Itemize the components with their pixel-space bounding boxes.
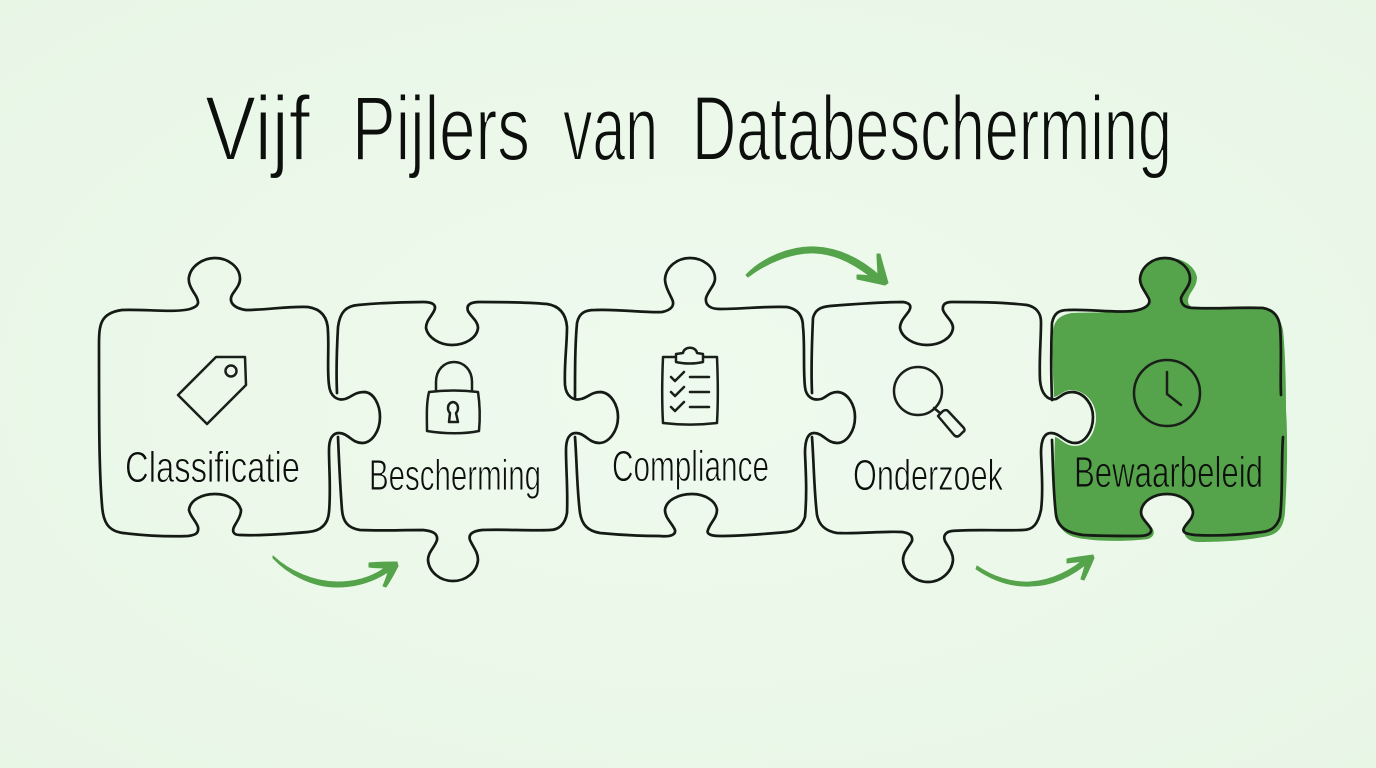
icon: magnifying glass xyxy=(894,367,964,436)
label: Compliance: Compliance xyxy=(612,442,769,491)
puzzle piece: Onderzoek xyxy=(812,302,1093,582)
icon: padlock xyxy=(427,362,480,433)
label: Classificatie: Classificatie xyxy=(125,443,300,492)
piece outline xyxy=(1051,258,1281,400)
piece outline xyxy=(575,258,855,536)
piece outline xyxy=(337,302,618,581)
label: Bewaarbeleid: Bewaarbeleid xyxy=(1074,448,1263,497)
label: Onderzoek: Onderzoek xyxy=(853,451,1004,500)
puzzle piece: Bewaarbeleid (highlighted) xyxy=(1051,258,1287,542)
puzzle piece: Bescherming xyxy=(337,302,618,581)
icon: clock xyxy=(1134,360,1200,426)
puzzle piece: Classificatie xyxy=(99,258,380,536)
piece outline xyxy=(812,302,1093,582)
puzzle piece: Compliance xyxy=(575,258,855,536)
piece outline lower xyxy=(1052,437,1283,536)
label: Bescherming: Bescherming xyxy=(369,451,541,500)
icon: clipboard checklist xyxy=(662,348,718,424)
title: Pijlers xyxy=(352,78,530,180)
icon: tag xyxy=(178,357,246,424)
green fill xyxy=(1053,258,1287,542)
arrow: Onderzoek to Bewaarbeleid xyxy=(976,555,1094,586)
piece outline xyxy=(99,258,380,536)
title: van xyxy=(563,78,658,180)
title: Vijf xyxy=(205,78,310,180)
arrow: Compliance to Onderzoek xyxy=(746,247,888,285)
arrow: Classificatie to Bescherming xyxy=(273,556,398,587)
